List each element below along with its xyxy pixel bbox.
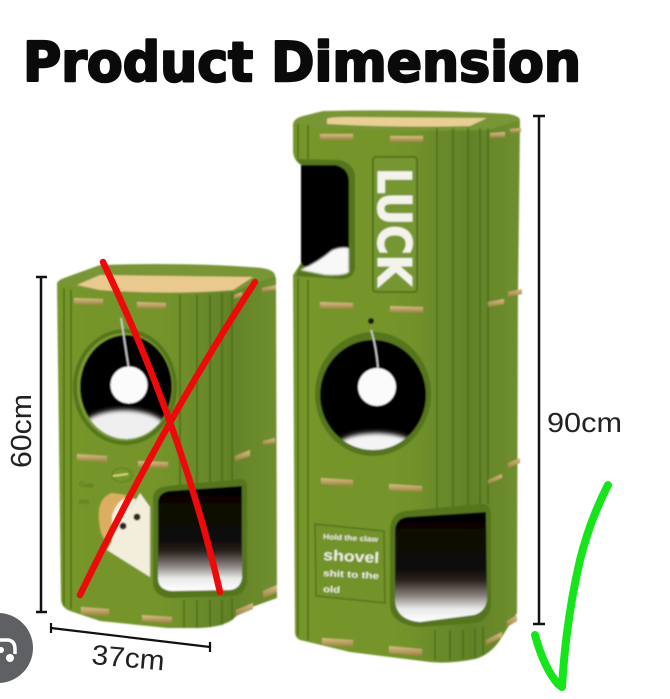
cream scratch pad <box>77 275 253 292</box>
title: Product Dimension <box>23 31 581 94</box>
search badge icon <box>0 613 33 683</box>
top rim and scratching pad <box>57 264 275 294</box>
cat illustration: Cute <box>79 481 94 490</box>
wooden pegs <box>320 128 522 656</box>
top rim <box>293 110 520 131</box>
cream scratch pad <box>327 117 487 127</box>
slogan sign: shovel <box>323 547 380 567</box>
LUCK panel: LUCK <box>367 168 421 288</box>
cat illustration <box>79 468 150 577</box>
dimension line: 37cm <box>51 623 210 652</box>
top opening with cushion <box>296 159 355 279</box>
square opening <box>153 479 247 598</box>
slogan sign: old <box>323 584 340 595</box>
small cat tower, 60cm <box>57 264 277 628</box>
round opening <box>315 332 431 467</box>
hanging pom-pom toy <box>358 330 396 406</box>
label: 60cm: 60cm <box>6 394 38 468</box>
round opening <box>73 329 177 458</box>
cat illustration: pet <box>79 498 89 506</box>
green check mark <box>535 485 608 687</box>
label: 90cm: 90cm <box>547 407 622 438</box>
tall cat tower, 90cm <box>293 110 522 663</box>
vertical ridges <box>64 288 232 628</box>
slogan sign <box>315 524 385 603</box>
bottom opening <box>390 504 491 627</box>
vertical ridges <box>298 124 488 660</box>
tower body <box>57 265 277 628</box>
hanger hole <box>368 318 374 324</box>
wooden pegs <box>74 285 277 623</box>
dimension line: 90cm <box>533 116 545 624</box>
hanging pom-pom toy <box>110 318 148 404</box>
slogan sign: shit to the <box>323 568 379 581</box>
red cross mark <box>80 262 255 595</box>
tower body <box>293 111 520 663</box>
label: 37cm: 37cm <box>90 639 166 676</box>
dimension line: 60cm <box>36 277 47 612</box>
slogan sign: Hold the claw <box>323 532 378 544</box>
